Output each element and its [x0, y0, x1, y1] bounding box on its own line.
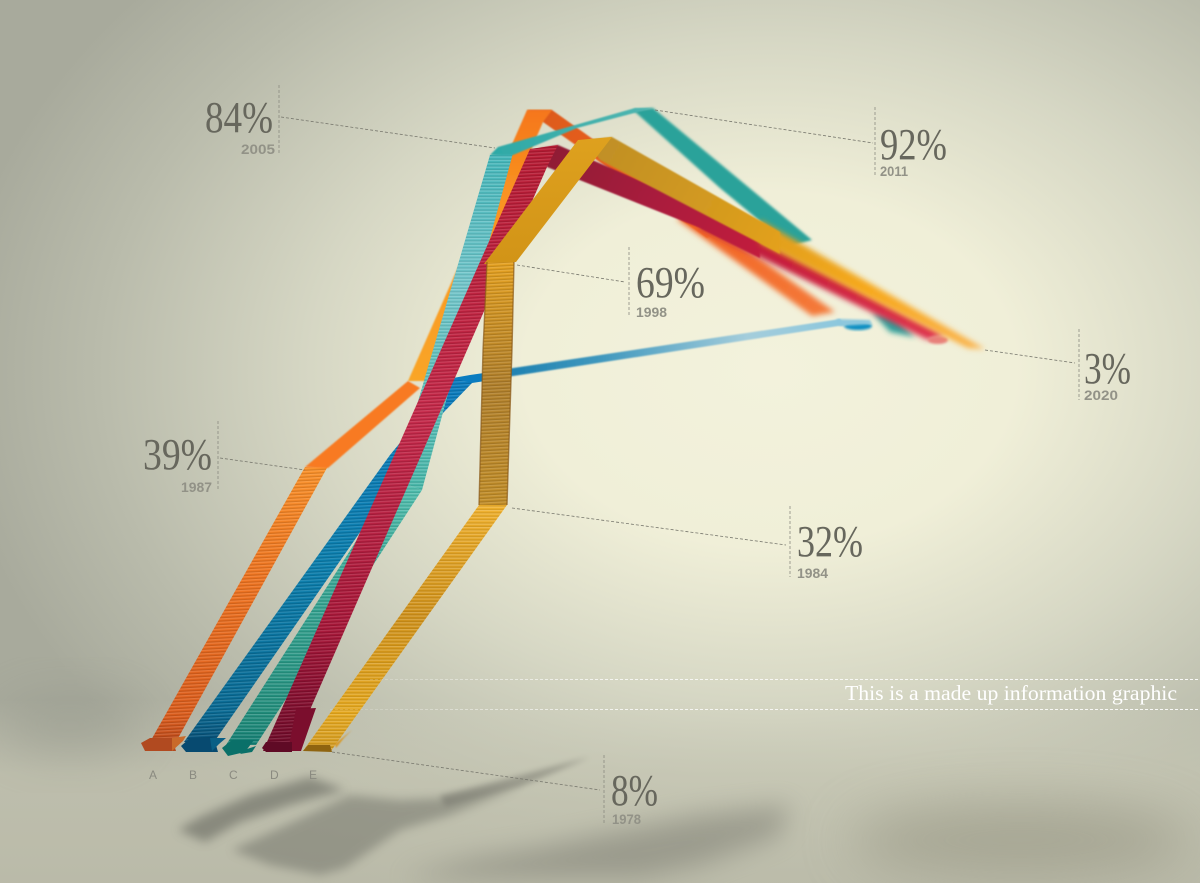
callout: 92% 2011: 2011 [880, 163, 908, 179]
callout: 84% 2005 [205, 85, 495, 157]
gold far section [585, 137, 985, 349]
ribbon far sections [408, 108, 948, 381]
callout: 39% 1987: 39% [143, 430, 212, 479]
callout: 32% 1984: 32% [797, 517, 863, 566]
ribbon letter labels: D [270, 768, 279, 782]
ribbon A top section [408, 110, 552, 381]
ribbon letter labels: C [229, 768, 238, 782]
ribbon letter labels: B [189, 768, 197, 782]
caption text: This is a made up information graphic [845, 681, 1177, 705]
ribbon A: orange [141, 381, 420, 751]
ribbon B far thin section [500, 319, 872, 378]
ribbon D: red [262, 145, 558, 752]
ribbon letter labels: E [309, 768, 317, 782]
ribbon C: teal [222, 108, 653, 756]
callout: 3% 2020: 3% [1084, 344, 1131, 393]
ribbon C right section [633, 108, 915, 337]
callout: 69% 1998: 69% [636, 258, 705, 307]
ground shadow of ribbons [178, 757, 790, 878]
callout: 3% 2020: 2020 [1084, 387, 1118, 403]
callout: 8% 1978: 1978 [612, 811, 641, 827]
ribbon letter labels [149, 768, 317, 782]
ribbon letter labels: A [149, 768, 157, 782]
callout: 32% 1984: 1984 [797, 565, 828, 581]
ribbon D right section [540, 145, 948, 344]
callout: 69% 1998 [517, 247, 705, 320]
ribbon B: blue [181, 370, 505, 752]
callout: 8% 1978: 8% [611, 766, 658, 815]
callout: 32% 1984 [512, 506, 863, 581]
ribbon E: gold [303, 137, 985, 752]
callout: 8% 1978 [332, 752, 658, 827]
gold upper section [484, 137, 612, 264]
callout: 84% 2005: 84% [205, 93, 273, 142]
callout: 92% 2011 [655, 107, 947, 179]
callout: 69% 1998: 1998 [636, 304, 667, 320]
callout: 92% 2011: 92% [880, 120, 947, 169]
callout: 3% 2020 [985, 329, 1131, 403]
callout: 39% 1987 [143, 421, 305, 495]
callout: 84% 2005: 2005 [241, 141, 275, 157]
ribbon A right section [527, 110, 835, 316]
callout: 39% 1987: 1987 [181, 479, 212, 495]
made-up caption band [330, 680, 1200, 710]
